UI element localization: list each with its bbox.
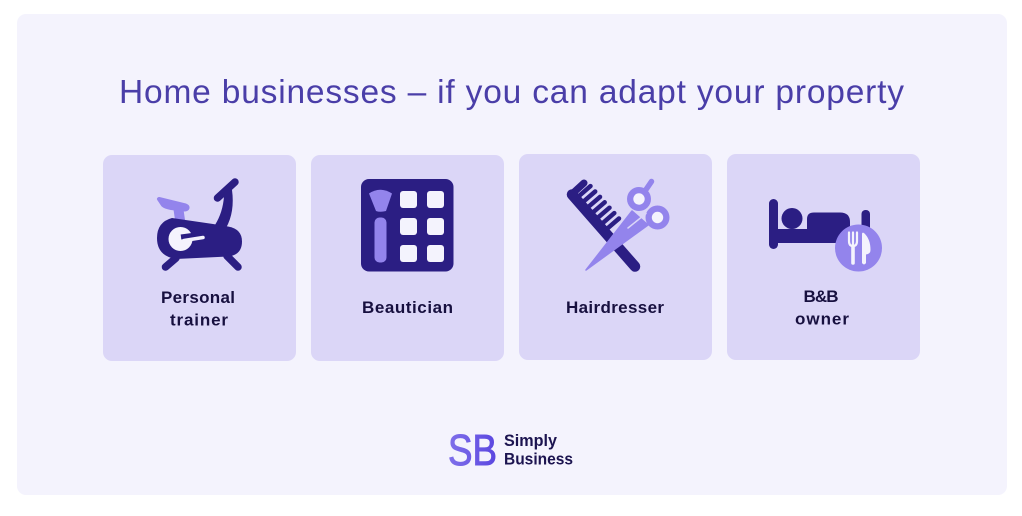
logo mark: SB — [448, 426, 497, 475]
label: personal trainer: Personal — [161, 288, 235, 307]
label: beautician: Beautician — [362, 298, 453, 317]
panel: b&b owner — [727, 154, 920, 360]
label: personal trainer — [161, 288, 235, 330]
label: b&b owner: owner — [795, 310, 849, 328]
logo wordmark — [504, 432, 573, 468]
label: hairdresser: Hairdresser — [566, 298, 664, 317]
icon: makeup palette — [361, 179, 454, 272]
panel: hairdresser — [519, 154, 712, 360]
label: b&b owner: B&B — [804, 287, 838, 306]
label: personal trainer: trainer — [170, 310, 228, 330]
title: Home businesses – if you can adapt your property — [119, 74, 904, 111]
panel: beautician — [311, 155, 504, 361]
logo wordmark: Business — [504, 450, 573, 468]
icon: comb and scissors — [572, 182, 670, 270]
logo wordmark: Simply — [504, 432, 558, 450]
icon: bed with cutlery — [769, 199, 882, 272]
panel: personal trainer — [103, 155, 296, 361]
logo: simply business — [448, 426, 573, 475]
label: b&b owner — [795, 287, 849, 328]
icon: exercise bike — [157, 182, 242, 267]
